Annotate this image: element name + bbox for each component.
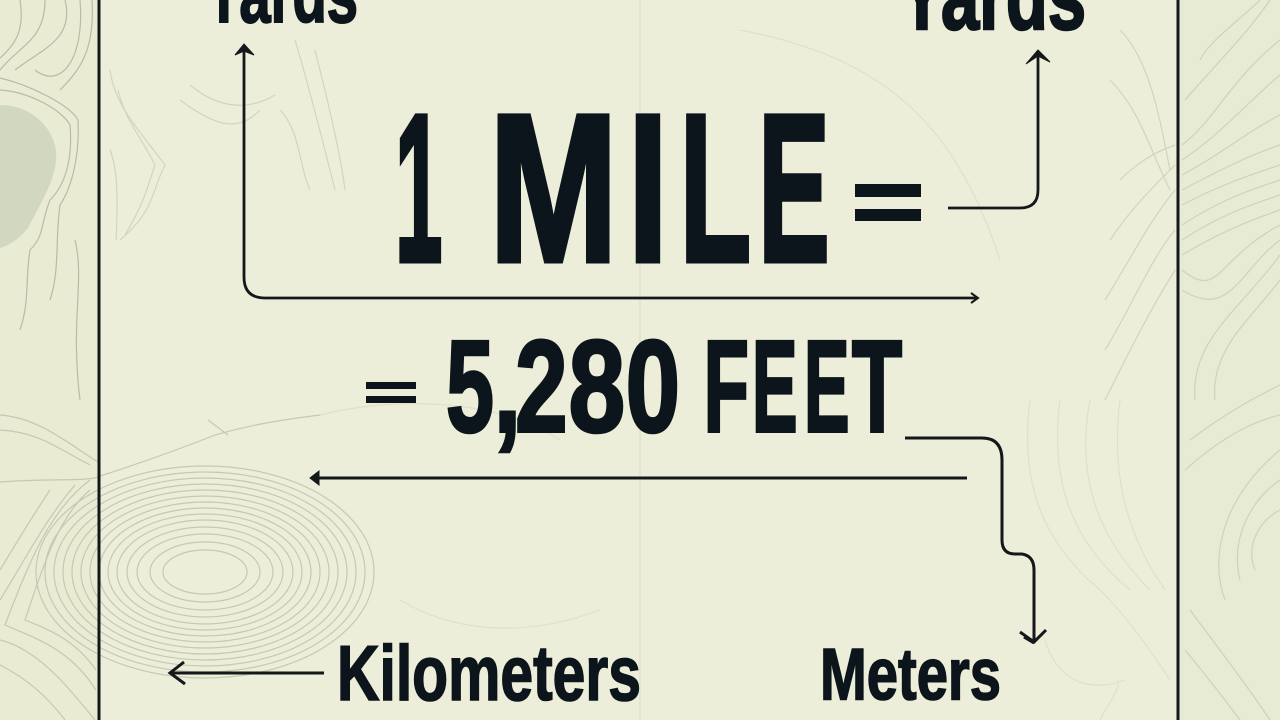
heading: 1 MILE =: L [680, 70, 751, 306]
arrow: long left arrow [310, 471, 967, 485]
arrow: Kilometers left [170, 662, 324, 684]
subheading: = 5,280 FEET: , [494, 312, 521, 460]
label: Kilometers: Kilometers [337, 629, 641, 717]
heading: 1 MILE = [395, 70, 921, 306]
subheading: = 5,280 FEET [366, 312, 902, 460]
heading: 1 MILE =: I [628, 70, 668, 306]
subheading: = 5,280 FEET: 8 [568, 312, 625, 460]
subheading: = 5,280 FEET: 0 [626, 312, 680, 460]
arrow: to right Yards [948, 50, 1050, 208]
frame right line [1176, 0, 1180, 720]
label: Meters: Meters [820, 634, 1001, 716]
frame left line [98, 0, 100, 720]
lake shape [0, 105, 56, 248]
subheading: = 5,280 FEET: 2 [515, 312, 568, 460]
heading: 1 MILE =: 1 [395, 70, 442, 306]
arrow: to left Yards and across [235, 44, 978, 303]
heading: 1 MILE =: M [489, 70, 618, 306]
subheading: = 5,280 FEET: 5 [446, 312, 494, 460]
heading: 1 MILE =: E [758, 70, 830, 306]
subheading: = 5,280 FEET: F [704, 312, 749, 460]
subheading: = 5,280 FEET: E [804, 312, 850, 460]
arrow: to Meters [905, 438, 1046, 643]
subheading: = 5,280 FEET: T [852, 312, 902, 460]
subheading: = 5,280 FEET: E [752, 312, 798, 460]
